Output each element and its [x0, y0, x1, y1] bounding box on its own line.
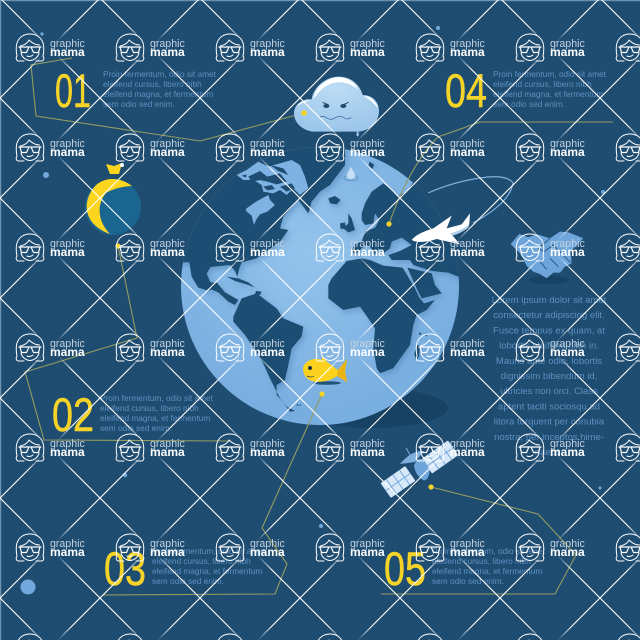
- step 05: [384, 542, 546, 595]
- continent: Iceland and British Isles: [328, 162, 374, 232]
- watermark logos: graphic: [50, 338, 85, 350]
- watermark logos: graphic: [450, 38, 485, 50]
- icon: angry cloud: [294, 77, 379, 137]
- watermark logos: graphic: [50, 238, 85, 250]
- step 04: [445, 64, 607, 117]
- watermark logos: mama: [550, 245, 585, 259]
- globe shadow: [296, 388, 448, 428]
- text 02: Proin fermentum, odio sit amet: [100, 393, 214, 403]
- watermark logos: graphic: [150, 38, 185, 50]
- text 04: sem odio sed enim.: [493, 99, 565, 109]
- watermark logos: graphic: [150, 438, 185, 450]
- watermark logos: mama: [350, 245, 385, 259]
- watermark logos: mama: [450, 545, 485, 559]
- number 02: 02: [52, 388, 94, 441]
- watermark logos: graphic: [50, 538, 85, 550]
- text 04: eleifend cursus, libero nibh: [493, 79, 592, 89]
- watermark logos: mama: [250, 145, 285, 159]
- text 05: eleifend cursus, libero nibh: [432, 556, 531, 566]
- continent: Madagascar and Comoros: [414, 332, 427, 360]
- text 01: sem odio sed enim.: [103, 99, 175, 109]
- text 02: eleifend magna, et fermentum: [100, 413, 210, 423]
- watermark logos: mama: [450, 145, 485, 159]
- watermark logos: graphic: [250, 438, 285, 450]
- watermark logos: graphic: [50, 438, 85, 450]
- number 01: 01: [55, 64, 91, 117]
- centered paragraph: Fusce tempus ex quam, at: [493, 325, 605, 336]
- centered paragraph: ultricies non orci. Class: [500, 386, 598, 397]
- watermark logos: mama: [450, 445, 485, 459]
- text 05: Proin fermentum, odio sit amet: [432, 546, 546, 556]
- watermark logos: mama: [350, 345, 385, 359]
- globe with continents: [181, 147, 459, 425]
- watermark logos: graphic: [550, 538, 585, 550]
- continent: Africa: [328, 258, 435, 373]
- watermark logos: graphic: [150, 138, 185, 150]
- text 01: eleifend magna, et fermentum: [103, 89, 213, 99]
- number 04: 04: [445, 64, 487, 117]
- watermark logos: graphic: [550, 138, 585, 150]
- icon: satellite: [381, 440, 458, 498]
- watermark logos: graphic: [450, 238, 485, 250]
- centered paragraph: Mauris ante odio, lobortis: [496, 356, 602, 367]
- watermark logos: mama: [50, 145, 85, 159]
- icon: fish: [303, 355, 347, 385]
- watermark logos: mama: [150, 245, 185, 259]
- text 03: Proin fermentum, odio sit amet: [152, 546, 266, 556]
- watermark logos: graphic: [450, 438, 485, 450]
- watermark logos: graphic: [250, 38, 285, 50]
- watermark logos: graphic: [450, 538, 485, 550]
- centered paragraph: naeos.: [535, 447, 563, 458]
- watermark logos: mama: [550, 445, 585, 459]
- watermark logos: mama: [350, 45, 385, 59]
- watermark logos: mama: [50, 45, 85, 59]
- watermark logos: mama: [150, 445, 185, 459]
- centered paragraph: consectetur adipiscing elit.: [493, 310, 605, 321]
- continent: South America: [233, 293, 303, 412]
- number 03: 03: [104, 542, 146, 595]
- watermark logos: mama: [550, 45, 585, 59]
- watermark logos: graphic: [550, 438, 585, 450]
- icon: airplane with contrail: [412, 177, 513, 244]
- number 05: 05: [384, 542, 426, 595]
- centered paragraph: Lorem ipsum dolor sit amet: [492, 295, 607, 306]
- watermark logos: graphic: [350, 438, 385, 450]
- step 01: [55, 64, 217, 117]
- watermark logos: mama: [150, 145, 185, 159]
- text 03: sem odio sed enim.: [152, 576, 224, 586]
- centered paragraph: dignissim bibendum id,: [501, 371, 597, 382]
- step 03: [104, 542, 266, 595]
- watermark logos: graphic: [550, 38, 585, 50]
- text 04: Proin fermentum, odio sit amet: [493, 69, 607, 79]
- connector end dots: [115, 110, 434, 490]
- text 03: eleifend magna, et fermentum: [152, 566, 262, 576]
- watermark logos: graphic: [150, 538, 185, 550]
- watermark logos: mama: [50, 245, 85, 259]
- watermark logos: mama: [150, 545, 185, 559]
- watermark logos: mama: [250, 45, 285, 59]
- text 01: eleifend cursus, libero nibh: [103, 79, 202, 89]
- watermark logos: graphic: [350, 238, 385, 250]
- continent: North America and arctic: [182, 147, 350, 293]
- watermark logos: mama: [50, 345, 85, 359]
- watermark logos: mama: [550, 545, 585, 559]
- step 02: [52, 388, 214, 441]
- watermark logos: mama: [250, 345, 285, 359]
- watermark logos: graphic: [250, 238, 285, 250]
- watermark logos: mama: [250, 445, 285, 459]
- watermark logos: mama: [350, 145, 385, 159]
- text 03: eleifend cursus, libero nibh: [152, 556, 251, 566]
- watermark logos: graphic: [350, 38, 385, 50]
- text 02: eleifend cursus, libero nibh: [100, 403, 199, 413]
- centered paragraph: nostra, per inceptos hime-: [494, 432, 604, 443]
- icon: handshake: [511, 232, 583, 284]
- centered paragraph: lobortis eleifend nibh in.: [499, 341, 599, 352]
- watermark logos: graphic: [50, 138, 85, 150]
- watermark logos: graphic: [150, 338, 185, 350]
- watermark logos: mama: [350, 445, 385, 459]
- watermark logos: graphic: [50, 38, 85, 50]
- watermark logos: mama: [450, 245, 485, 259]
- watermark logos: mama: [50, 545, 85, 559]
- watermark logos: graphic: [250, 338, 285, 350]
- watermark logos: mama: [250, 545, 285, 559]
- text 05: eleifend magna, et fermentum: [432, 566, 542, 576]
- watermark logos: graphic: [250, 138, 285, 150]
- continent: Central America and Caribbean: [211, 276, 302, 406]
- connector lines: [25, 58, 613, 595]
- watermark logos: graphic: [450, 338, 485, 350]
- text 01: Proin fermentum, odio sit amet: [103, 69, 217, 79]
- centered paragraph: aptent taciti sociosqu ad: [498, 401, 600, 412]
- continent: Scandinavia and Eurasia: [352, 182, 458, 280]
- text 04: eleifend magna, et fermentum: [493, 89, 603, 99]
- icon: moon and planet: [85, 163, 141, 235]
- watermark logos: mama: [150, 45, 185, 59]
- watermark logos: graphic: [550, 338, 585, 350]
- continent: Arabia: [407, 268, 442, 298]
- text 05: sem odio sed enim.: [432, 576, 504, 586]
- watermark logos: mama: [450, 45, 485, 59]
- watermark logos: mama: [350, 545, 385, 559]
- Arctic and Hudson seas: [237, 160, 308, 225]
- centered paragraph: litora torquent per conubia: [494, 417, 605, 428]
- watermark logos: mama: [150, 345, 185, 359]
- water drop on globe: [344, 167, 358, 181]
- watermark logos: mama: [450, 345, 485, 359]
- watermark logos: graphic: [350, 338, 385, 350]
- watermark logos: graphic: [450, 138, 485, 150]
- watermark logos: graphic: [350, 138, 385, 150]
- watermark logos: mama: [550, 145, 585, 159]
- watermark logos: graphic: [550, 238, 585, 250]
- watermark logos: mama: [550, 345, 585, 359]
- watermark logos: mama: [50, 445, 85, 459]
- watermark logos: graphic: [150, 238, 185, 250]
- watermark logos: mama: [250, 245, 285, 259]
- watermark logos: graphic: [250, 538, 285, 550]
- watermark logos: graphic: [350, 538, 385, 550]
- text 02: sem odio sed enim.: [100, 423, 172, 433]
